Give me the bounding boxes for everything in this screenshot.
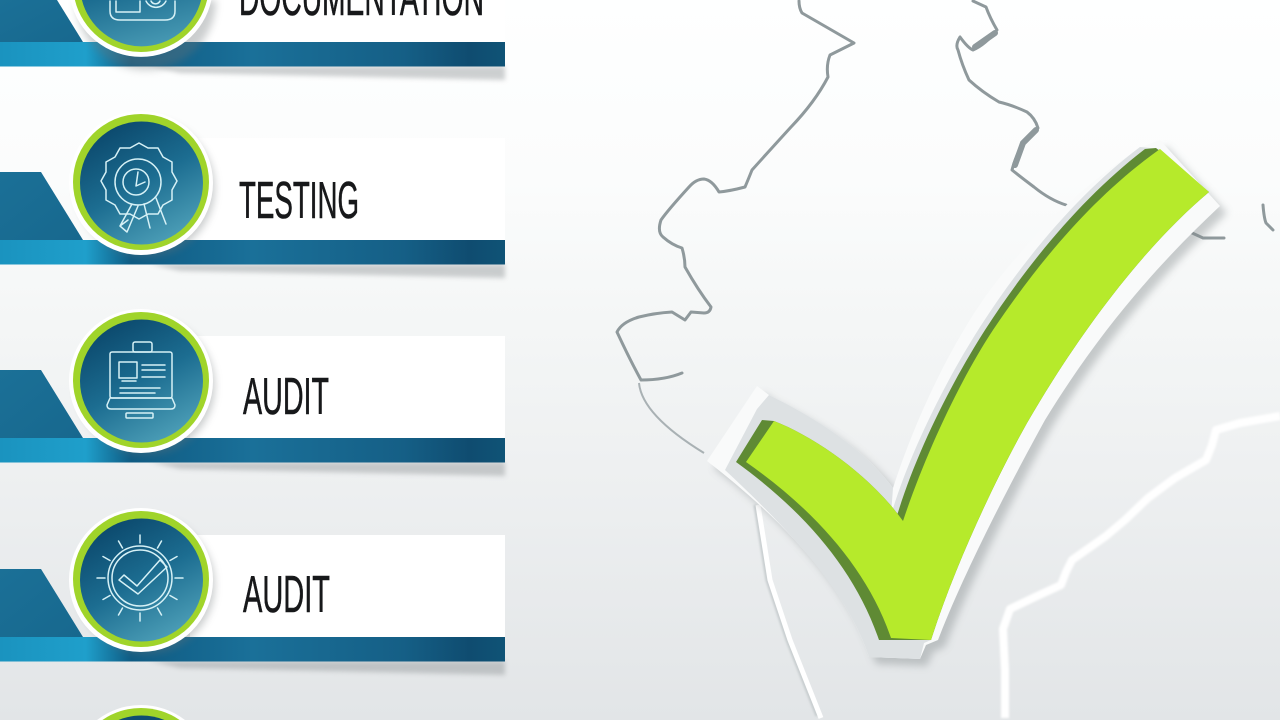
- label: audit: AUDIT: [243, 566, 330, 624]
- icon: documentation certificate: [110, 1, 175, 20]
- icon: testing badge: [101, 143, 177, 232]
- map outline: east border: [957, 1, 1273, 238]
- map outline: west border: [617, 1, 854, 453]
- label: audit: AUDIT: [243, 368, 329, 426]
- icon: audit check seal: [97, 535, 183, 621]
- row: next item badge: [97, 705, 185, 720]
- row: audit one: [0, 309, 505, 476]
- check mark: [707, 140, 1227, 666]
- icon: audit laptop: [107, 342, 175, 418]
- row: testing: [0, 111, 505, 278]
- label: testing: TESTING: [239, 172, 359, 230]
- map outline: white coast lines: [755, 416, 1280, 718]
- row: documentation: [0, 0, 505, 80]
- row: audit two: [0, 508, 505, 675]
